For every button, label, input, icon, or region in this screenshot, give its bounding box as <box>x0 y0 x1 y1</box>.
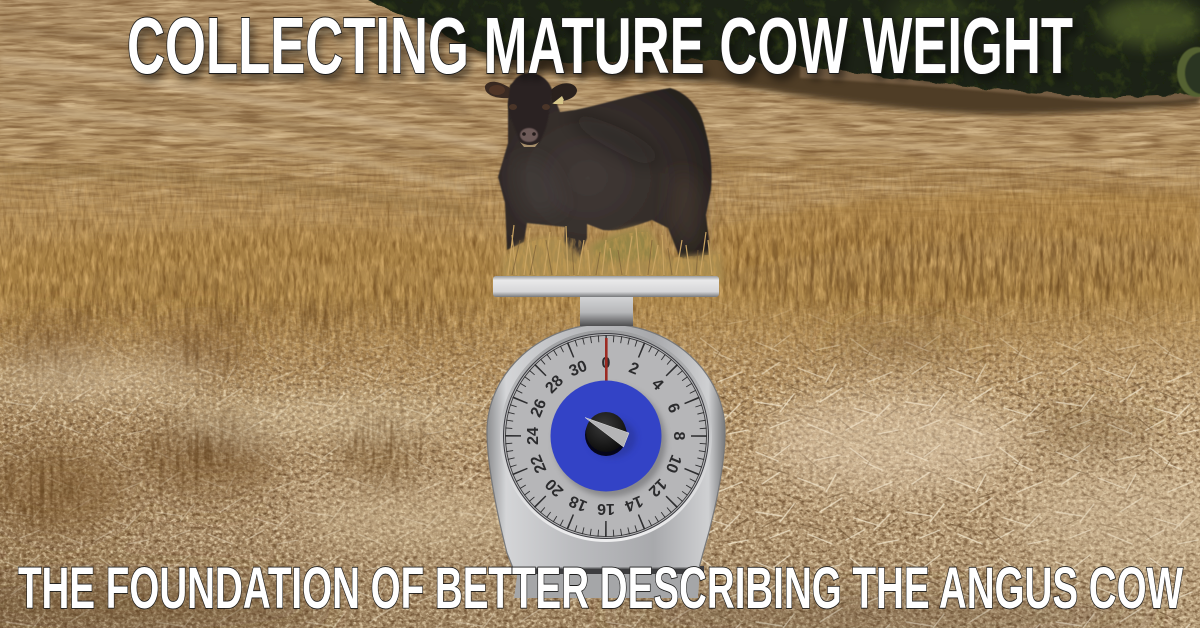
dial numbers <box>525 355 687 517</box>
scale top plate <box>493 276 719 297</box>
dial numbers: 20 <box>542 475 567 500</box>
dark stubble tufts <box>0 204 1200 550</box>
scale feet <box>514 568 700 598</box>
dial numbers: 30 <box>567 358 590 380</box>
knob pointer <box>585 418 629 447</box>
dial numbers: 14 <box>622 492 645 514</box>
dial face <box>504 334 708 538</box>
dial numbers: 16 <box>597 500 615 517</box>
cow <box>485 73 712 264</box>
dial numbers: 2 <box>626 359 641 379</box>
cow muzzle <box>520 128 538 142</box>
ear tag <box>552 96 564 104</box>
loose straw zone <box>0 290 1200 628</box>
weighing scale <box>487 276 725 598</box>
dial numbers: 4 <box>648 376 666 394</box>
dial ticks <box>506 336 706 536</box>
dial numbers: 18 <box>567 492 590 514</box>
dial numbers: 12 <box>645 475 670 500</box>
shaded field edge below trees <box>400 0 1200 114</box>
cow head <box>508 73 552 146</box>
hillside contour bands <box>0 28 1200 270</box>
scale body <box>487 324 725 568</box>
dial numbers: 26 <box>528 397 550 420</box>
stubble zone <box>0 164 1200 388</box>
red needle <box>605 338 608 383</box>
round bush at right edge <box>1177 47 1200 97</box>
blue hub <box>550 380 662 492</box>
knob <box>585 412 636 458</box>
light and dark patches <box>0 323 1200 628</box>
dial numbers: 8 <box>670 432 687 441</box>
hillside streaks <box>0 0 1200 240</box>
cow body <box>498 73 712 264</box>
scale stem <box>580 296 633 326</box>
blue hub shadow <box>554 385 666 497</box>
dial numbers: 28 <box>542 372 567 397</box>
grass at cow's feet <box>500 225 724 282</box>
cow eyes <box>509 104 517 110</box>
dial ring <box>500 330 712 542</box>
cow ears <box>485 82 510 98</box>
dial numbers: 0 <box>602 355 611 372</box>
dial numbers: 10 <box>662 452 684 475</box>
tree canopy <box>368 0 1200 98</box>
dial numbers: 22 <box>528 452 550 475</box>
cow shading <box>514 112 704 250</box>
distant tree line <box>300 0 1200 114</box>
dial numbers: 6 <box>663 401 683 416</box>
dial numbers: 24 <box>525 427 542 445</box>
